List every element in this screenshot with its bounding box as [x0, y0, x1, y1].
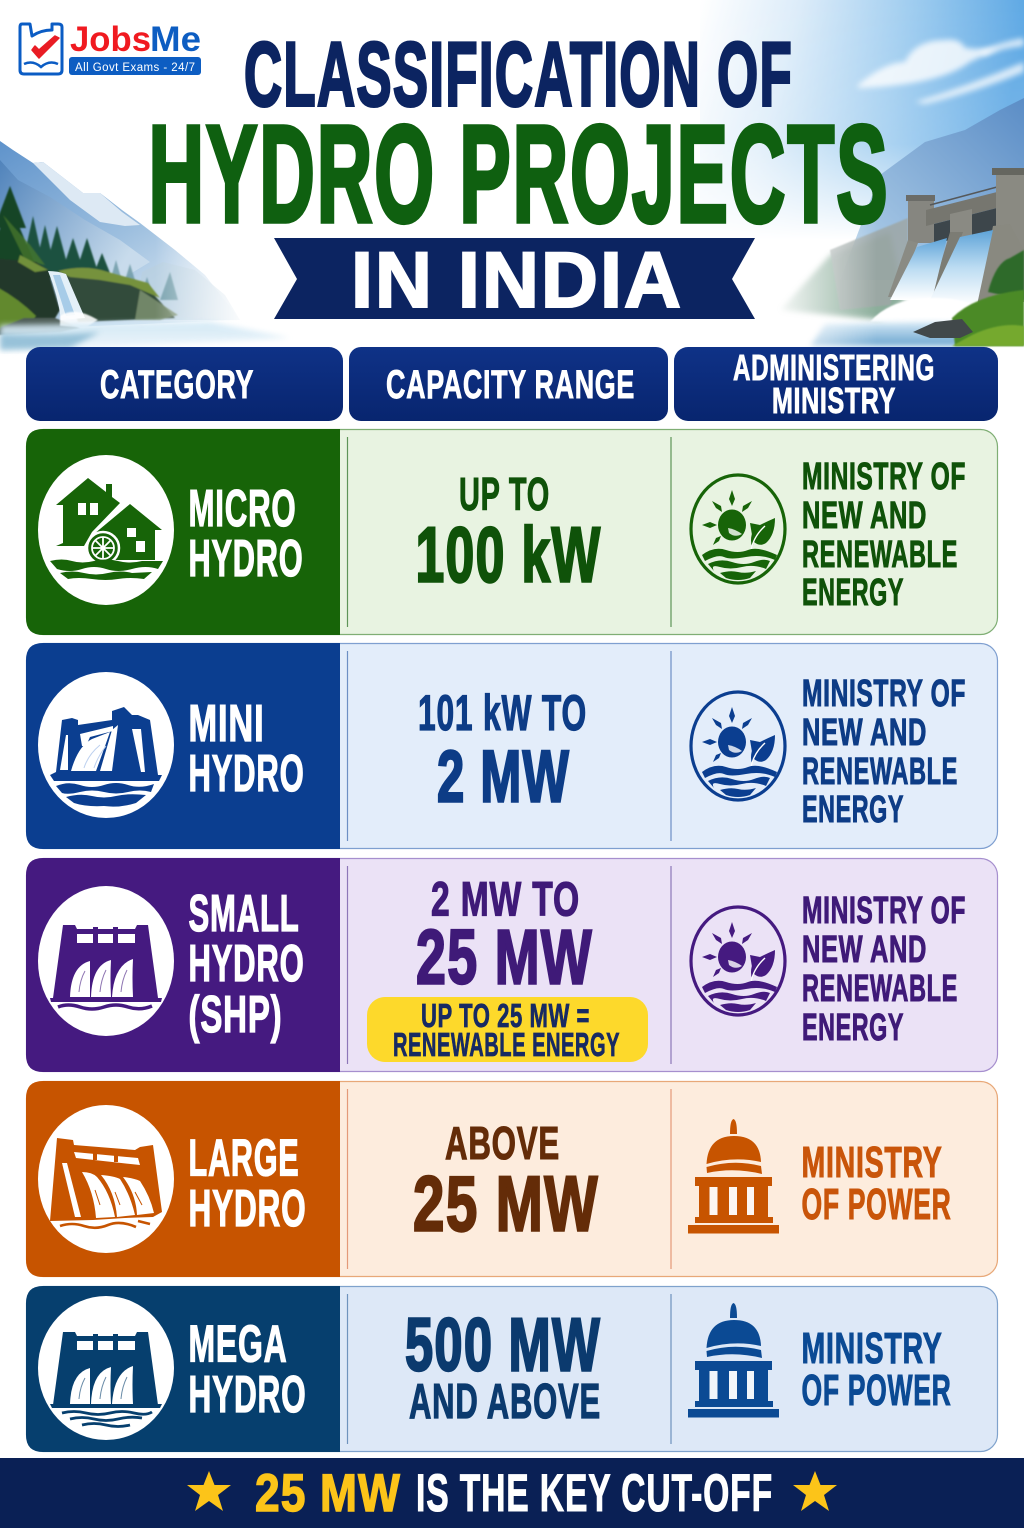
ministry name: MINISTRY	[802, 1138, 942, 1187]
footer text highlight: 25 MW	[255, 1464, 401, 1523]
ministry name	[802, 1324, 952, 1415]
title	[148, 24, 890, 324]
ministry name: NEW AND	[802, 495, 927, 537]
category label: HYDRO	[188, 935, 304, 993]
ministry name	[802, 890, 966, 1049]
ministry icon: sun, leaf and water	[691, 692, 785, 800]
header: category	[26, 347, 343, 421]
row: mini hydro	[26, 643, 998, 849]
row: micro hydro	[26, 429, 998, 635]
icon: left star	[187, 1471, 231, 1511]
category label: HYDRO	[188, 530, 304, 588]
header: administering ministry: MINISTRY	[772, 380, 896, 421]
hero scenery: water	[0, 322, 290, 352]
distant faded trees	[112, 260, 178, 301]
header: capacity range: CAPACITY RANGE	[386, 363, 635, 407]
footer text: IS THE KEY CUT-OFF	[416, 1464, 773, 1523]
capacity text: 500 MW	[405, 1302, 601, 1386]
category label	[188, 885, 304, 1044]
icon: large dam	[38, 1105, 174, 1253]
capacity text: 25 MW	[413, 1160, 599, 1248]
category cell	[26, 1286, 340, 1452]
ministry icon: sun, leaf and water	[691, 475, 785, 583]
capacity text: 101 kW TO	[418, 685, 587, 741]
logo wordmark: Me	[150, 20, 201, 59]
ministry name: ENERGY	[802, 572, 904, 614]
header: capacity range	[349, 347, 668, 421]
category label	[188, 1316, 306, 1424]
header: category: CATEGORY	[100, 363, 254, 407]
header: administering ministry: ADMINISTERING	[733, 347, 935, 388]
category label: SMALL	[188, 885, 300, 943]
ministry name	[802, 456, 966, 614]
dividers	[348, 651, 671, 841]
category label	[188, 695, 304, 803]
category label: HYDRO	[188, 745, 304, 803]
category label: (SHP)	[188, 986, 282, 1044]
category cell	[26, 643, 340, 849]
row panel background	[26, 1286, 998, 1452]
category label: LARGE	[188, 1130, 300, 1188]
dividers	[348, 1089, 671, 1269]
capacity text: 2 MW TO	[431, 874, 580, 926]
icon: mini dam	[38, 672, 174, 818]
category cell	[26, 858, 340, 1072]
capacity text	[416, 468, 602, 598]
ministry name: ENERGY	[802, 1007, 904, 1049]
callout: up to 25 MW renewable energy: UP TO 25 MW =	[421, 997, 590, 1034]
icon: book with checkmark	[20, 24, 62, 74]
callout: up to 25 MW renewable energy: RENEWABLE ENERGY	[393, 1026, 620, 1063]
row: small hydro	[26, 858, 998, 1072]
logo wordmark: Jobs	[70, 20, 151, 59]
icon: right star	[793, 1471, 837, 1511]
icon: mega dam	[38, 1296, 174, 1440]
logo tagline pill: All Govt Exams - 24/7	[75, 62, 195, 74]
header: administering ministry	[674, 347, 998, 421]
category label: MEGA	[188, 1316, 288, 1374]
category cell	[26, 1081, 340, 1277]
ministry name: ENERGY	[802, 789, 904, 831]
hero scenery: left mountains, forest and waterfall	[0, 141, 240, 335]
ministry name	[802, 1138, 952, 1229]
logo wordmark	[70, 20, 201, 59]
logo: JobsMe	[20, 20, 201, 75]
table header	[26, 347, 998, 421]
ministry icon: domed building	[688, 1119, 779, 1234]
footer banner	[0, 1458, 1024, 1528]
capacity text	[413, 1117, 599, 1248]
ministry icon: sun, leaf and water	[691, 907, 785, 1015]
category label: MINI	[188, 695, 264, 753]
ministry name: NEW AND	[802, 712, 927, 754]
capacity text	[418, 685, 587, 818]
capacity text: UP TO	[459, 468, 550, 520]
ministry name	[802, 673, 966, 831]
row panel background	[26, 644, 998, 848]
capacity text: 25 MW	[416, 914, 593, 1000]
ministry name: NEW AND	[802, 929, 927, 971]
capacity text: 2 MW	[437, 736, 570, 818]
hero scenery: sky	[700, 0, 1024, 240]
row: mega hydro	[26, 1286, 998, 1452]
category cell	[26, 429, 340, 635]
dividers	[348, 1294, 671, 1444]
title ribbon: in india: IN INDIA	[351, 235, 683, 324]
icon: small dam	[38, 886, 174, 1036]
capacity text: 100 kW	[416, 510, 602, 598]
icon: watermill	[38, 455, 174, 605]
capacity text	[405, 1302, 601, 1429]
row panel background	[26, 858, 998, 1072]
category label	[188, 480, 304, 588]
category label: HYDRO	[188, 1366, 306, 1424]
capacity text: ABOVE	[445, 1117, 560, 1169]
category label: HYDRO	[188, 1180, 306, 1238]
dividers	[348, 437, 671, 627]
title ribbon: in india	[274, 235, 755, 324]
row: large hydro	[26, 1081, 998, 1277]
dividers	[348, 866, 671, 1064]
logo tagline pill	[69, 57, 201, 75]
row panel background	[26, 1082, 998, 1276]
ministry icon: domed building	[688, 1303, 779, 1418]
hero scenery: right mountain and dam	[780, 98, 1024, 346]
capacity text: AND ABOVE	[409, 1375, 601, 1429]
category label: MICRO	[188, 480, 296, 538]
capacity text	[416, 874, 593, 1000]
callout: up to 25 MW renewable energy	[367, 997, 648, 1063]
row panel background	[26, 430, 998, 634]
category label	[188, 1130, 306, 1238]
ministry name: MINISTRY	[802, 1324, 942, 1373]
